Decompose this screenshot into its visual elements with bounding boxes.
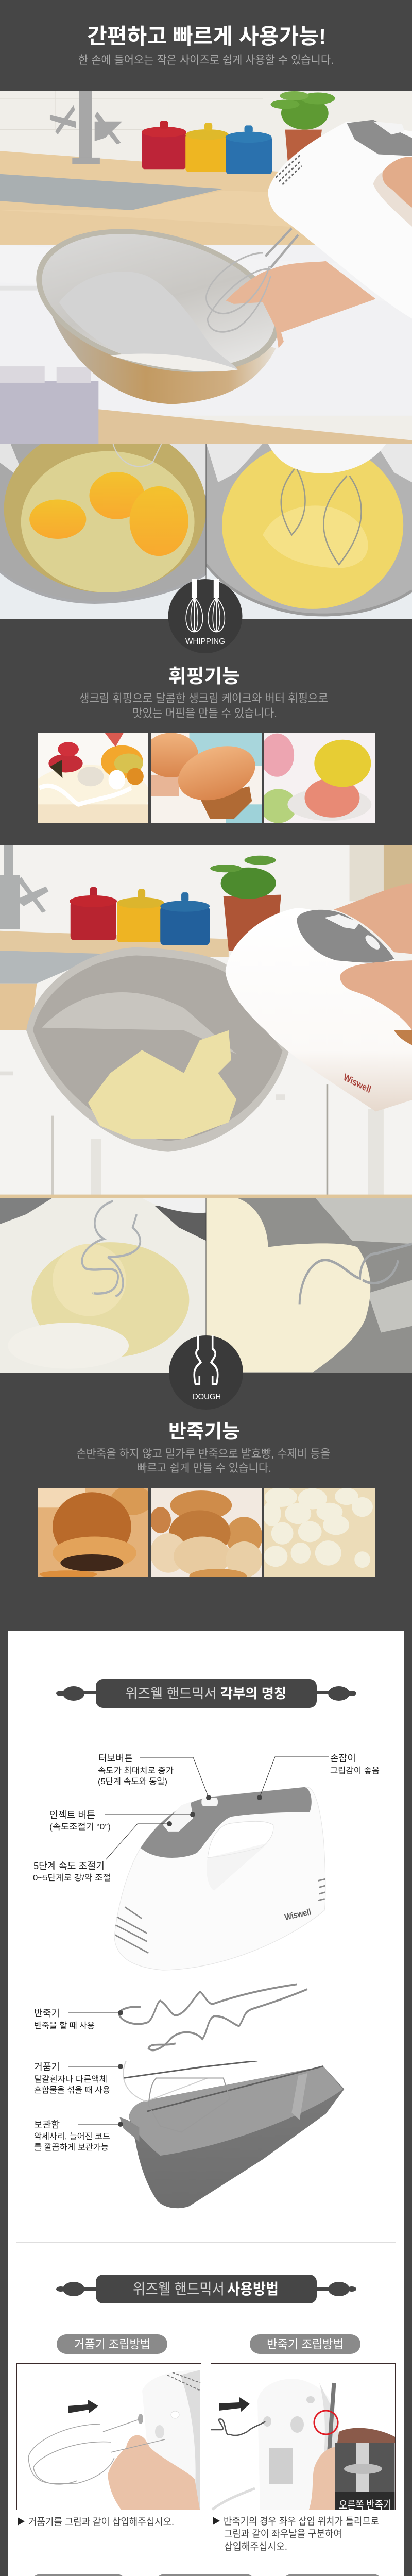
label: handle <box>330 1753 380 1775</box>
inset photo: 오른쪽 반죽기 <box>339 2499 391 2512</box>
whisk <box>28 2419 165 2484</box>
pill: dough hook assembly: 반죽기 조립방법 <box>267 2337 344 2351</box>
photo: raw eggs in bowl <box>0 444 206 619</box>
arrow <box>68 2400 98 2413</box>
hand holding bowl <box>226 261 376 348</box>
rod <box>327 2383 336 2450</box>
whipping description: 생크림 휘핑으로 달콤한 생크림 케이크와 버터 휘핑으로 <box>79 692 328 705</box>
pill: dough hook assembly <box>250 2334 360 2354</box>
pill: whisk assembly <box>57 2334 167 2354</box>
arrow <box>219 2397 250 2412</box>
captions: assembly: 그림과 같이 좌우날을 구분하여 <box>224 2528 342 2539</box>
dough hooks <box>118 1984 308 2052</box>
label: storage: 악세사리, 늘어진 코드 <box>34 2132 110 2141</box>
callout dots <box>118 1795 262 2127</box>
title: 간편하고 빠르게 사용가능! <box>87 24 326 48</box>
whipping description <box>79 692 328 720</box>
logo on mixer: Wiswell <box>284 1907 312 1922</box>
photo: dough being mixed in kitchen <box>0 845 412 1198</box>
dough heading: 반죽기능 <box>168 1421 240 1442</box>
plant <box>210 856 281 951</box>
icon: dough hooks <box>193 1335 218 1385</box>
label: handle: 손잡이 <box>330 1753 356 1764</box>
bowl with dough <box>26 947 289 1152</box>
hand <box>337 2428 395 2443</box>
whipping heading: 휘핑기능 <box>168 666 240 687</box>
captions: assembly: 거품기를 그림과 같이 삽입해주십시오. <box>28 2516 174 2528</box>
label: eject <box>49 1810 111 1832</box>
label: turbo: 속도가 최대치로 증가 <box>98 1766 174 1775</box>
dough hook <box>300 1244 412 1304</box>
label: dough hook: 반죽을 할 때 사용 <box>34 2021 95 2030</box>
badge label: WHIPPING <box>185 637 225 646</box>
captions: assembly <box>18 2516 379 2552</box>
heading ribbon: parts: 위즈웰 핸드믹서 <box>125 1686 217 1701</box>
icon: whisks <box>185 579 226 633</box>
thumbnail: muffins <box>151 733 262 823</box>
hands on mixer <box>334 883 412 1030</box>
inset photo <box>335 2443 394 2512</box>
label: storage: 보관함 <box>34 2120 60 2130</box>
label: eject: 인젝트 버튼 <box>49 1810 95 1820</box>
label: turbo: (5단계 속도와 동일) <box>98 1777 167 1786</box>
steel bowl <box>27 208 289 404</box>
whisk <box>206 228 298 332</box>
label: speed: 5단계 속도 조절기 <box>33 1861 105 1871</box>
dough description: 빠르고 쉽게 만들 수 있습니다. <box>137 1462 271 1475</box>
label: whisk: 달걀흰자나 다른액체 <box>34 2075 107 2084</box>
label: dough hook <box>34 2008 95 2030</box>
heading ribbon: parts <box>56 1679 356 1708</box>
thumbnail: dough balls <box>264 1488 375 1577</box>
pill: speed control <box>31 2574 126 2576</box>
label: whisk: 거품기 <box>34 2062 60 2072</box>
captions: assembly: 반죽기의 경우 좌우 삽입 위치가 틀리므로 <box>224 2516 379 2527</box>
cord <box>212 2488 255 2510</box>
label: whisk: 혼합물을 섞을 때 사용 <box>34 2086 110 2095</box>
label: speed <box>33 1861 111 1883</box>
photo: whipped eggs with beaters <box>206 444 412 619</box>
heading ribbon: usage: 사용방법 <box>227 2281 279 2298</box>
faucet <box>50 91 122 164</box>
thumbnail: cream cake <box>38 733 148 823</box>
header <box>78 24 334 66</box>
red yellow and blue pots <box>142 121 272 174</box>
heading ribbon: usage <box>56 2275 356 2303</box>
callouts: part names <box>33 1753 380 2152</box>
storage box with whisks <box>119 2061 344 2208</box>
label: handle: 그립감이 좋음 <box>330 1766 380 1775</box>
product illustration: hand mixer <box>114 1787 325 1970</box>
whipping description: 맛있는 머핀을 만들 수 있습니다. <box>132 707 277 720</box>
photo: dough being mixed in kitchen: Wiswell <box>342 1071 372 1095</box>
thumbnail: chocolate scone <box>38 1488 148 1577</box>
heading ribbon: usage: 위즈웰 핸드믹서 <box>133 2281 225 2298</box>
photo: flour and batter with dough hook <box>0 1198 206 1373</box>
callout lines <box>68 1757 329 2124</box>
heading ribbon: parts: 각부의 명칭 <box>220 1686 286 1701</box>
label: turbo: 터보버튼 <box>98 1753 133 1764</box>
label: whisk <box>34 2062 110 2095</box>
photo: mixer over steel bowl in kitchen <box>0 91 412 444</box>
dough description <box>76 1447 330 1475</box>
pots <box>70 887 210 945</box>
badge label: DOUGH <box>193 1393 221 1401</box>
frame: dough hook assembly photo <box>211 2364 396 2512</box>
pill: whisk assembly: 거품기 조립방법 <box>74 2337 150 2351</box>
pill: turbo button <box>155 2574 255 2576</box>
captions: assembly: 삽입해주십시오. <box>224 2541 287 2552</box>
thumbnail: bread rolls <box>151 1488 262 1577</box>
photo: kneaded dough with hook <box>206 1198 412 1373</box>
thumbnail: macarons <box>264 733 375 823</box>
label: storage: 를 깔끔하게 보관가능 <box>34 2143 109 2152</box>
label: turbo <box>98 1753 174 1786</box>
faucet <box>0 845 48 929</box>
icon: dough badge <box>169 1335 243 1410</box>
pill: eject button <box>282 2574 383 2576</box>
hook being inserted <box>211 2419 265 2435</box>
frame: whisk assembly photo <box>16 2364 201 2510</box>
label: eject: (속도조절기 “0”) <box>49 1822 111 1832</box>
hand <box>108 2435 200 2510</box>
subtitle: 한 손에 들어오는 작은 사이즈로 쉽게 사용할 수 있습니다. <box>78 54 334 66</box>
potted plant <box>271 91 335 161</box>
label: speed: 0~5단계로 강/약 조절 <box>33 1873 111 1883</box>
white content panel <box>8 1631 404 2576</box>
red circle highlight <box>314 2411 338 2434</box>
dough description: 손반죽을 하지 않고 밀가루 반죽으로 발효빵, 수제비 등을 <box>76 1447 330 1460</box>
label: storage <box>34 2120 110 2152</box>
hand mixer with grey grip <box>226 908 412 1111</box>
dough hook <box>82 1201 140 1296</box>
icon: whipping badge <box>168 579 242 653</box>
hand mixer <box>268 120 412 319</box>
label: dough hook: 반죽기 <box>34 2008 60 2019</box>
carved pillar and wall <box>350 845 384 901</box>
